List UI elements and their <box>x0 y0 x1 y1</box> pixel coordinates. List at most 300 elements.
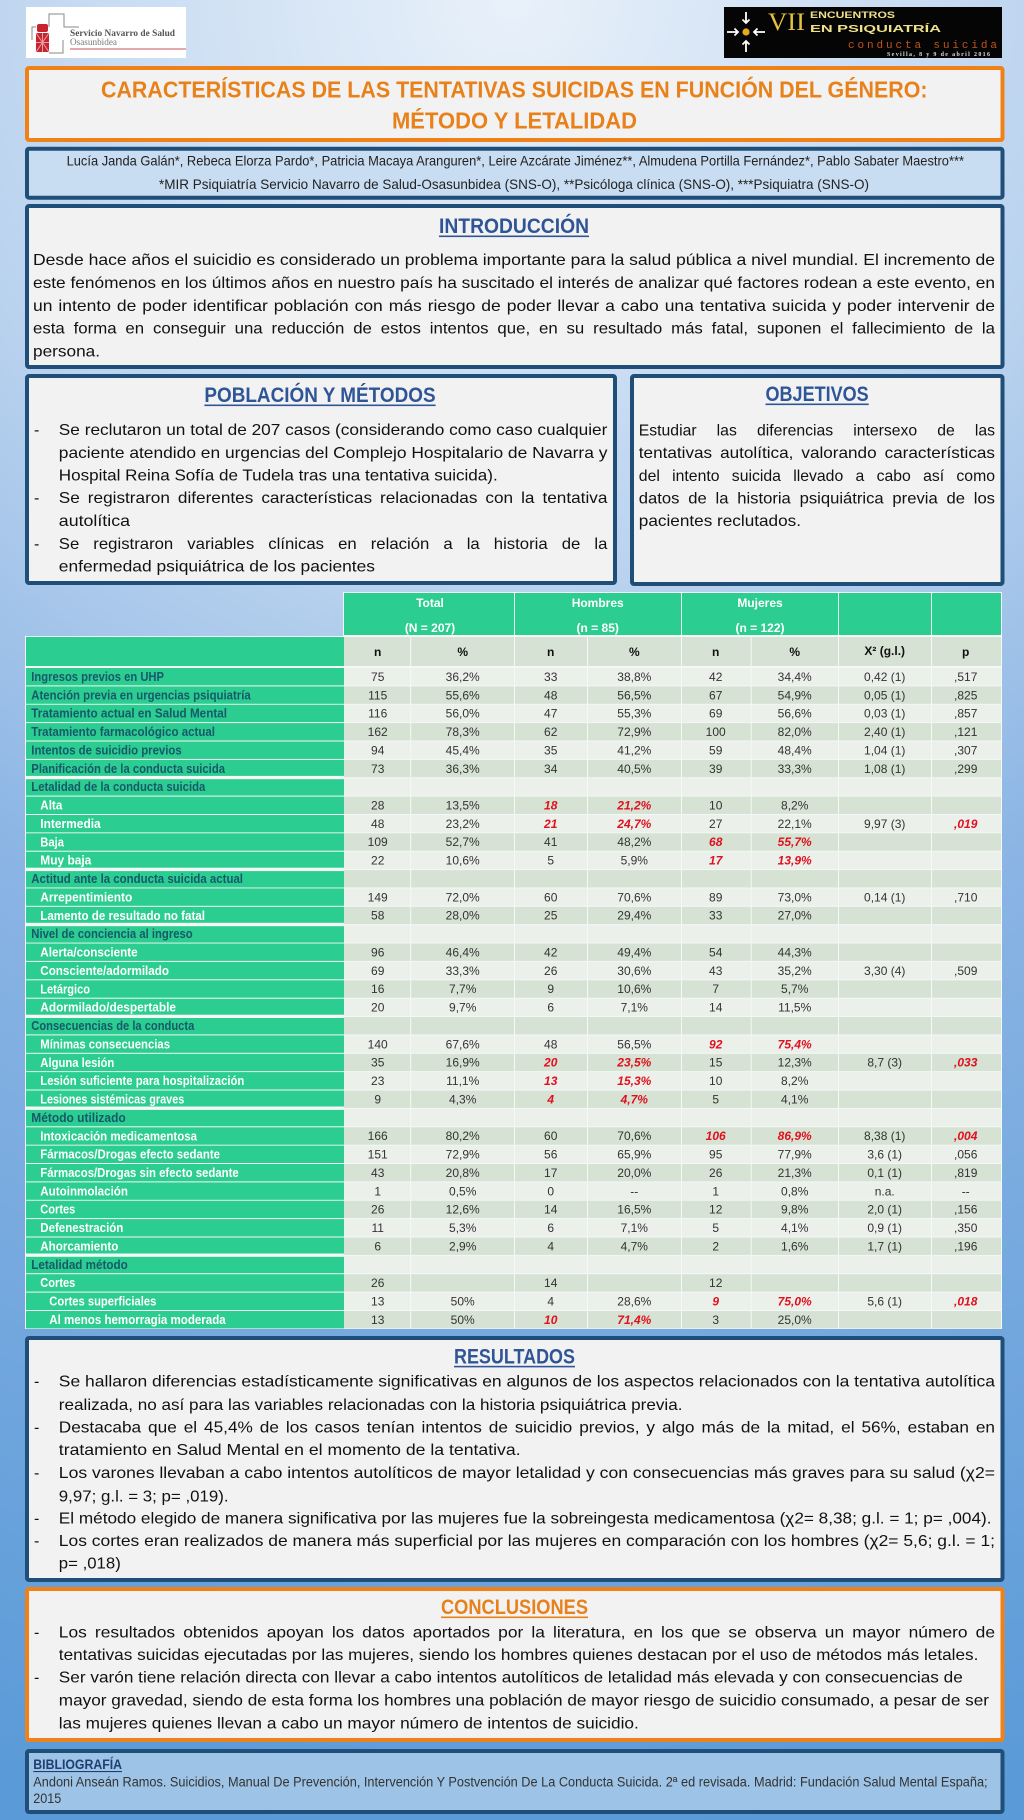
row: Intermedia: 9,97 (3) <box>864 817 905 831</box>
row: Alta: 28 <box>371 798 385 812</box>
row: Adormilado/despertable: 9,7% <box>449 1001 477 1015</box>
row: Intentos de suicidio previos: 59 <box>709 743 723 757</box>
text block: población y métodos: Se registraron diferentes características relacionadas con la tentativa <box>59 490 608 507</box>
row: Ahorcamiento: 4,7% <box>621 1239 648 1253</box>
text block: resultados: 9,97; g.l. = 3; p= ,019). <box>59 1489 229 1506</box>
row: Tratamiento actual en Salud Mental: 56,6% <box>778 707 812 721</box>
row: Defenestración <box>26 1219 1001 1236</box>
row: Ahorcamiento: 2 <box>712 1239 719 1253</box>
row: Arrepentimiento: 73,0% <box>778 890 812 904</box>
row: Intentos de suicidio previos: Intentos de suicidio previos <box>31 744 182 758</box>
row: Baja: 55,7% <box>778 835 812 849</box>
row: Baja: 52,7% <box>446 835 480 849</box>
row: Consciente/adormilado: 35,2% <box>778 964 812 978</box>
table header: groups: (n = 122) <box>735 621 785 635</box>
row: Lesiones sistémicas graves: 4,1% <box>781 1092 809 1106</box>
heading: objetivos: OBJETIVOS <box>766 383 869 406</box>
row: Ahorcamiento: ,196 <box>954 1239 978 1253</box>
row: Defenestración: ,350 <box>954 1221 978 1235</box>
row: Lamento de resultado no fatal: 25 <box>544 909 558 923</box>
row: Autoinmolación: 1 <box>712 1184 719 1198</box>
row: Alerta/consciente: 49,4% <box>617 945 652 959</box>
text block: población y métodos: enfermedad psiquiátrica de los pacientes <box>59 559 375 576</box>
row: Adormilado/despertable: Adormilado/despertable <box>40 1001 176 1015</box>
row: Fármacos/Drogas efecto sedante: 3,6 (1) <box>867 1148 902 1162</box>
row: Fármacos/Drogas sin efecto sedante: 20,8% <box>446 1166 480 1180</box>
logo: VII Encuentros en Psiquiatría: ENCUENTROS <box>810 10 895 20</box>
row: Cortes: Cortes <box>40 1203 75 1217</box>
text block: resultados: realizada, no así para las variables relacionadas con la historia psiquiátrica previa. <box>59 1397 683 1414</box>
row: Fármacos/Drogas efecto sedante: 151 <box>368 1148 388 1162</box>
row: Baja <box>26 833 1001 851</box>
text block: población y métodos: Se reclutaron un total de 207 casos (considerando como caso cualquier <box>59 422 608 439</box>
text block: objetivos: Estudiar las diferencias intersexo de las <box>639 423 995 440</box>
row: Letárgico: 10,6% <box>617 982 652 996</box>
row: Intoxicación medicamentosa: 8,38 (1) <box>864 1129 905 1143</box>
row: Fármacos/Drogas efecto sedante: 77,9% <box>778 1148 812 1162</box>
row: Alerta/consciente: Alerta/consciente <box>40 946 138 960</box>
text block: introducción <box>33 252 995 360</box>
row: Cortes superficiales: ,018 <box>953 1295 978 1309</box>
row: Consciente/adormilado: 3,30 (4) <box>864 964 905 978</box>
row: Atención previa en urgencias psiquiatría: 0,05 (1) <box>864 688 905 702</box>
row: Intentos de suicidio previos: ,307 <box>954 743 978 757</box>
heading: introducción: INTRODUCCIÓN <box>439 214 589 238</box>
row: Cortes <box>26 1201 1001 1218</box>
table header: columns: n <box>547 645 554 659</box>
row: Tratamiento actual en Salud Mental: 56,0% <box>446 707 480 721</box>
row: Consciente/adormilado <box>26 962 1001 979</box>
row: Tratamiento farmacológico actual: 62 <box>544 725 558 739</box>
row: Lesión suficiente para hospitalización: 11,1% <box>446 1074 480 1088</box>
row: Ahorcamiento: 1,7 (1) <box>867 1239 902 1253</box>
row: Adormilado/despertable: 6 <box>547 1001 554 1015</box>
logo: VII Encuentros en Psiquiatría: VII <box>768 9 805 36</box>
logo: Servicio Navarro de Salud: Osasunbidea <box>70 37 117 47</box>
row: Letalidad de la conducta suicida: Letalidad de la conducta suicida <box>31 780 206 794</box>
text block: bibliografía: 2015 <box>33 1791 61 1806</box>
row: Autoinmolación: 1 <box>374 1184 381 1198</box>
heading: población y métodos: POBLACIÓN Y MÉTODOS <box>204 383 436 407</box>
row: Fármacos/Drogas sin efecto sedante: 21,3% <box>778 1166 812 1180</box>
text block: población y métodos: paciente atendido en urgencias del Complejo Hospitalario de Navarra y <box>59 445 607 462</box>
row: Tratamiento actual en Salud Mental: Tratamiento actual en Salud Mental <box>31 707 227 721</box>
row: Al menos hemorragia moderada: 71,4% <box>617 1313 652 1327</box>
row: Letárgico <box>26 980 1001 998</box>
row: Muy baja: Muy baja <box>40 854 92 868</box>
row: Atención previa en urgencias psiquiatría: 56,5% <box>617 688 652 702</box>
row: Lamento de resultado no fatal: Lamento de resultado no fatal <box>40 909 205 923</box>
row: Lesiones sistémicas graves: 4,7% <box>620 1092 648 1106</box>
row: Alta: 21,2% <box>616 798 652 812</box>
row: Fármacos/Drogas sin efecto sedante <box>26 1164 1001 1181</box>
row: Alta <box>26 797 1001 814</box>
row: Alguna lesión: Alguna lesión <box>40 1056 114 1070</box>
text block: bibliografía <box>33 1775 988 1806</box>
row: Intoxicación medicamentosa: 166 <box>368 1129 388 1143</box>
title panel <box>27 68 1002 140</box>
row: Letárgico: 7 <box>712 982 719 996</box>
row: Tratamiento actual en Salud Mental: 0,03 (1) <box>864 707 905 721</box>
row: Adormilado/despertable: 14 <box>709 1001 723 1015</box>
row: Letalidad método: Letalidad método <box>31 1258 128 1272</box>
row: Planificación de la conducta suicida: 39 <box>709 762 723 776</box>
row: Arrepentimiento <box>26 888 1001 906</box>
row: Atención previa en urgencias psiquiatría: Atención previa en urgencias psiquiatría <box>31 688 252 702</box>
row: Cortes superficiales: 5,6 (1) <box>867 1295 902 1309</box>
text block: resultados: - <box>34 1465 39 1482</box>
row: Arrepentimiento: 60 <box>544 890 558 904</box>
row: Intermedia <box>26 815 1001 832</box>
row: Alta: 18 <box>544 798 558 812</box>
text block: resultados: Destacaba que el 45,4% de los casos tenían intentos de suicidio previos, y algo más de la mitad, el 56%, estaban en <box>59 1420 995 1437</box>
row: Defenestración: Defenestración <box>40 1221 123 1235</box>
row: Lesiones sistémicas graves: 4 <box>546 1092 554 1106</box>
row: Mínimas consecuencias: 75,4% <box>778 1037 812 1051</box>
row: Tratamiento farmacológico actual: 72,9% <box>617 725 652 739</box>
row: Cortes superficiales: 28,6% <box>617 1295 652 1309</box>
row: Cortes (letalidad método): Cortes <box>40 1276 75 1290</box>
table header: columns: p <box>962 645 969 659</box>
text block: objetivos: pacientes reclutados. <box>639 513 801 530</box>
table header: columns: n <box>374 645 381 659</box>
heading: bibliografía: BIBLIOGRAFÍA <box>33 1757 122 1772</box>
row: Planificación de la conducta suicida: 34 <box>544 762 558 776</box>
text block: resultados: Los cortes eran realizados de manera más superficial por las mujeres en comparación con los hombres (χ2= 5,6; g.l. = 1; <box>59 1533 995 1550</box>
row: Intermedia: ,019 <box>953 817 978 831</box>
row: Baja: 48,2% <box>617 835 652 849</box>
row: Intoxicación medicamentosa: 70,6% <box>617 1129 652 1143</box>
row: Mínimas consecuencias: 140 <box>368 1037 388 1051</box>
row: Cortes superficiales: 75,0% <box>778 1295 812 1309</box>
table header: columns: n <box>712 645 719 659</box>
row: Planificación de la conducta suicida <box>26 760 1001 777</box>
row: Lesiones sistémicas graves: 9 <box>374 1092 381 1106</box>
text block: resultados: Se hallaron diferencias estadísticamente significativas en algunos de los aspectos relacionados con la tentativa autolítica <box>59 1374 995 1391</box>
row: Muy baja <box>26 852 1001 869</box>
row: Lesión suficiente para hospitalización <box>26 1072 1001 1090</box>
row: Actitud ante la conducta suicida actual <box>26 870 1001 888</box>
row: Fármacos/Drogas efecto sedante <box>26 1146 1001 1163</box>
row: Lesión suficiente para hospitalización: 13 <box>544 1074 558 1088</box>
row: Lesión suficiente para hospitalización: Lesión suficiente para hospitalización <box>40 1074 244 1088</box>
table: características por género <box>25 592 1002 1329</box>
row: Consciente/adormilado: 43 <box>709 964 723 978</box>
row: Ahorcamiento: 4 <box>547 1239 554 1253</box>
row: Mínimas consecuencias: 67,6% <box>446 1037 480 1051</box>
row: Ingresos previos en UHP: Ingresos previos en UHP <box>31 670 164 684</box>
text block: resultados: - <box>34 1510 39 1527</box>
text block: introducción: este fenómenos en los últimos años en nuestro país ha suscitado el interés de analizar qué factores rodean a este evento, en <box>33 275 995 292</box>
row: Intentos de suicidio previos: 1,04 (1) <box>864 743 905 757</box>
row: Fármacos/Drogas sin efecto sedante: 0,1 (1) <box>867 1166 902 1180</box>
row: Intermedia: 21 <box>543 817 558 831</box>
row: Método utilizado <box>26 1109 1001 1126</box>
row: Letalidad método <box>26 1256 1001 1273</box>
table header: columns: % <box>629 645 640 659</box>
row: Cortes (letalidad método): 14 <box>544 1276 558 1290</box>
row: Intermedia: 23,2% <box>446 817 480 831</box>
row: Fármacos/Drogas efecto sedante: 72,9% <box>446 1148 480 1162</box>
row: Lamento de resultado no fatal: 27,0% <box>778 909 812 923</box>
row: Cortes: 16,5% <box>617 1203 652 1217</box>
logo: Servicio Navarro de Salud: Servicio Navarro de Salud <box>70 28 175 38</box>
row: Arrepentimiento: 89 <box>709 890 723 904</box>
row: Muy baja: 5,9% <box>621 854 648 868</box>
row: Consecuencias de la conducta: Consecuencias de la conducta <box>31 1019 195 1033</box>
row: Cortes superficiales: 13 <box>371 1295 385 1309</box>
row: Consciente/adormilado: 30,6% <box>617 964 652 978</box>
row: Lesiones sistémicas graves: 4,3% <box>449 1092 477 1106</box>
text block: resultados: El método elegido de manera significativa por las mujeres fue la sobreingesta medicamentosa (χ2= 8,38; g.l. = 1; p= ,004). <box>59 1510 992 1527</box>
row: Adormilado/despertable <box>26 999 1001 1016</box>
panel: objetivos <box>632 376 1002 584</box>
row: Fármacos/Drogas efecto sedante: ,056 <box>954 1148 978 1162</box>
logo: VII Encuentros en Psiquiatría <box>724 7 1002 58</box>
row: Atención previa en urgencias psiquiatría: 67 <box>709 688 723 702</box>
row: Mínimas consecuencias: Mínimas consecuencias <box>40 1037 170 1051</box>
row: Consciente/adormilado: 26 <box>544 964 558 978</box>
row: Al menos hemorragia moderada: 50% <box>451 1313 475 1327</box>
row: Intentos de suicidio previos: 41,2% <box>617 743 652 757</box>
row: Autoinmolación: Autoinmolación <box>40 1184 128 1198</box>
row: Tratamiento farmacológico actual: 78,3% <box>446 725 480 739</box>
heading: conclusiones: CONCLUSIONES <box>441 1596 588 1619</box>
text block: introducción: Desde hace años el suicidio es considerado un problema importante para la salud pública a nivel mundial. El incremento de <box>33 252 995 269</box>
row: Fármacos/Drogas sin efecto sedante: Fármacos/Drogas sin efecto sedante <box>40 1166 239 1180</box>
row: Fármacos/Drogas sin efecto sedante: 26 <box>709 1166 723 1180</box>
row: Fármacos/Drogas sin efecto sedante: ,819 <box>954 1166 978 1180</box>
row: Cortes superficiales <box>26 1293 1001 1310</box>
row: Intoxicación medicamentosa: 80,2% <box>446 1129 480 1143</box>
table header: groups: Mujeres <box>737 596 783 610</box>
row: Lesión suficiente para hospitalización: 8,2% <box>781 1074 809 1088</box>
row: Mínimas consecuencias: 56,5% <box>617 1037 652 1051</box>
panel: población y métodos <box>27 376 615 583</box>
row: Alta: 8,2% <box>781 798 809 812</box>
text block: conclusiones: Ser varón tiene relación directa con llevar a cabo intentos autolíticos de letalidad más elevada y con consecuencias de <box>59 1670 963 1687</box>
row: Mínimas consecuencias: 92 <box>709 1037 723 1051</box>
row: Alerta/consciente: 44,3% <box>778 945 812 959</box>
text block: conclusiones: Los resultados obtenidos apoyan los datos aportados por la literatura, en los que se observa un mayor número de <box>59 1625 995 1642</box>
logo: VII Encuentros en Psiquiatría: conducta suicida <box>848 40 997 52</box>
row: Autoinmolación: 0 <box>547 1184 554 1198</box>
row: Ingresos previos en UHP: 75 <box>371 670 385 684</box>
row: Al menos hemorragia moderada: 3 <box>712 1313 719 1327</box>
text block: población y métodos <box>34 422 608 576</box>
text block: población y métodos: - <box>34 490 39 507</box>
row: Alerta/consciente <box>26 944 1001 961</box>
row: Planificación de la conducta suicida: 33,3% <box>778 762 812 776</box>
row: Intentos de suicidio previos: 94 <box>371 743 385 757</box>
row: Cortes: ,156 <box>954 1203 978 1217</box>
authors panel <box>27 149 1002 198</box>
row: Alta: Alta <box>40 799 63 813</box>
row: Fármacos/Drogas efecto sedante: 65,9% <box>617 1148 652 1162</box>
text block: conclusiones: - <box>34 1625 39 1642</box>
row: Lesión suficiente para hospitalización: 15,3% <box>617 1074 652 1088</box>
row: Tratamiento actual en Salud Mental: 69 <box>709 707 723 721</box>
row: Fármacos/Drogas efecto sedante: Fármacos/Drogas efecto sedante <box>40 1148 220 1162</box>
row: Lamento de resultado no fatal: 33 <box>709 909 723 923</box>
row: Fármacos/Drogas sin efecto sedante: 17 <box>544 1166 558 1180</box>
text block: conclusiones: tentativas suicidas ejecutadas por las mujeres, siendo los hombres quienes destacan por el uso de métodos más letales. <box>59 1647 978 1664</box>
row: Intoxicación medicamentosa: 86,9% <box>778 1129 812 1143</box>
row: Ingresos previos en UHP: 36,2% <box>446 670 480 684</box>
row: Defenestración: 5 <box>712 1221 719 1235</box>
row: Cortes superficiales: 4 <box>547 1295 554 1309</box>
row: Método utilizado: Método utilizado <box>31 1111 126 1125</box>
text block: resultados: p= ,018) <box>59 1555 121 1572</box>
panel: conclusiones <box>27 1589 1002 1740</box>
row: Al menos hemorragia moderada: 13 <box>371 1313 385 1327</box>
logo: VII Encuentros en Psiquiatría: Sevilla, 8 y 9 de abril 2016 <box>887 52 990 58</box>
row: Alguna lesión: 16,9% <box>446 1056 480 1070</box>
row: Tratamiento farmacológico actual: 162 <box>368 725 388 739</box>
row: Arrepentimiento: 0,14 (1) <box>864 890 905 904</box>
logo: Servicio Navarro de Salud <box>26 7 186 58</box>
row: Letárgico: 5,7% <box>781 982 809 996</box>
row: Al menos hemorragia moderada: 10 <box>544 1313 558 1327</box>
text block: resultados: - <box>34 1533 39 1550</box>
row: Lamento de resultado no fatal <box>26 907 1001 924</box>
row: Al menos hemorragia moderada: 25,0% <box>778 1313 812 1327</box>
row: Tratamiento farmacológico actual: 100 <box>706 725 726 739</box>
row: Intoxicación medicamentosa: 106 <box>706 1129 726 1143</box>
row: Consciente/adormilado: Consciente/adormilado <box>40 964 169 978</box>
row: Intermedia: Intermedia <box>40 817 102 831</box>
text block: población y métodos: Se registraron variables clínicas en relación a la historia de la <box>59 536 608 553</box>
row: Tratamiento actual en Salud Mental: 55,3% <box>617 707 652 721</box>
table header: columns <box>26 637 1001 666</box>
row: Autoinmolación: 0,8% <box>781 1184 809 1198</box>
row: Adormilado/despertable: 7,1% <box>621 1001 648 1015</box>
row: Alguna lesión: 20 <box>543 1056 558 1070</box>
text block: objetivos: tentativas autolítica, valorando características <box>639 445 995 462</box>
row: Intentos de suicidio previos: 45,4% <box>446 743 480 757</box>
text block: objetivos: datos de la historia psiquiátrica previa de los <box>639 490 995 508</box>
row: Lesiones sistémicas graves: Lesiones sistémicas graves <box>40 1092 184 1106</box>
heading: resultados: RESULTADOS <box>454 1345 575 1368</box>
row: Consciente/adormilado: ,509 <box>954 964 978 978</box>
row: Fármacos/Drogas sin efecto sedante: 43 <box>371 1166 385 1180</box>
row: Al menos hemorragia moderada: Al menos hemorragia moderada <box>49 1313 227 1327</box>
panel: bibliografía <box>27 1751 1002 1812</box>
row: Autoinmolación: 0,5% <box>449 1184 477 1198</box>
row: Tratamiento actual en Salud Mental: ,857 <box>954 707 978 721</box>
row: Defenestración: 4,1% <box>781 1221 809 1235</box>
row: Alerta/consciente: 96 <box>371 945 385 959</box>
row: Arrepentimiento: 70,6% <box>617 890 652 904</box>
row: Lesión suficiente para hospitalización: 23 <box>371 1074 385 1088</box>
row: Tratamiento farmacológico actual: Tratamiento farmacológico actual <box>31 725 215 739</box>
row: Arrepentimiento: ,710 <box>954 890 978 904</box>
row: Cortes: 14 <box>544 1203 558 1217</box>
row: Planificación de la conducta suicida: 36,3% <box>446 762 480 776</box>
authors panel: *MIR Psiquiatría Servicio Navarro de Salud-Osasunbidea (SNS-O), **Psicóloga clínica (SNS-O), ***Psiquiatra (SNS-O) <box>159 176 869 192</box>
row: Actitud ante la conducta suicida actual: Actitud ante la conducta suicida actual <box>31 872 243 886</box>
text block: resultados: - <box>34 1374 39 1391</box>
row: Defenestración: 0,9 (1) <box>867 1221 902 1235</box>
row: Alguna lesión: 15 <box>709 1056 723 1070</box>
row: Cortes: 12,6% <box>446 1203 480 1217</box>
row: Ingresos previos en UHP <box>26 668 1001 685</box>
row: Arrepentimiento: Arrepentimiento <box>40 890 133 904</box>
row: Consciente/adormilado: 33,3% <box>446 964 480 978</box>
row: Ingresos previos en UHP: ,517 <box>954 670 978 684</box>
text block: conclusiones: las mujeres quienes llevan a cabo un mayor número de intentos de suicidio. <box>59 1715 639 1732</box>
row: Alguna lesión <box>26 1054 1001 1071</box>
row: Defenestración: 7,1% <box>621 1221 648 1235</box>
row: Alguna lesión: ,033 <box>953 1056 978 1070</box>
row: Cortes (letalidad método) <box>26 1274 1001 1292</box>
table header: columns: X² (g.l.) <box>864 644 905 658</box>
row: Autoinmolación <box>26 1182 1001 1200</box>
row: Consciente/adormilado: 69 <box>371 964 385 978</box>
text block: población y métodos: Hospital Reina Sofía de Tudela tras una tentativa suicida). <box>59 468 498 484</box>
row: Planificación de la conducta suicida: 40,5% <box>617 762 652 776</box>
row: Intentos de suicidio previos: 48,4% <box>778 743 812 757</box>
row: Baja: 41 <box>544 835 558 849</box>
row: Intentos de suicidio previos: 35 <box>544 743 558 757</box>
row: Alguna lesión: 12,3% <box>778 1056 812 1070</box>
row: Intentos de suicidio previos <box>26 742 1001 759</box>
row: Defenestración: 6 <box>547 1221 554 1235</box>
row: Cortes superficiales: Cortes superficiales <box>49 1295 156 1309</box>
table header: groups: Total <box>416 596 444 610</box>
table header: groups: (N = 207) <box>405 621 455 635</box>
row: Ingresos previos en UHP: 38,8% <box>617 670 652 684</box>
text block: introducción: un intento de poder identificar población con más riesgo de poder llevar a cabo una tentativa suicida y poder intervenir de <box>33 298 995 315</box>
row: Alerta/consciente: 54 <box>709 945 723 959</box>
row: Lesiones sistémicas graves: 5 <box>712 1092 719 1106</box>
row: Lamento de resultado no fatal: 58 <box>371 909 385 923</box>
text block: conclusiones: mayor gravedad, siendo de esta forma los hombres una población de mayor riesgo de suicidio consumado, a pesar de ser <box>59 1693 990 1710</box>
row: Tratamiento actual en Salud Mental: 47 <box>544 707 558 721</box>
row: Muy baja: 22 <box>371 854 385 868</box>
row: Fármacos/Drogas efecto sedante: 95 <box>709 1148 723 1162</box>
row: Alerta/consciente: 42 <box>544 945 558 959</box>
row: Lesiones sistémicas graves <box>26 1090 1001 1108</box>
row: Intermedia: 24,7% <box>616 817 652 831</box>
row: Cortes: 2,0 (1) <box>867 1203 902 1217</box>
text block: introducción: esta forma en conseguir una reducción de estos intentos que, en su resultado más fatal, suponen el fallecimiento de la <box>33 320 995 338</box>
row: Muy baja: 17 <box>709 854 724 868</box>
row: Ahorcamiento: 2,9% <box>449 1239 477 1253</box>
row: Letalidad de la conducta suicida <box>26 778 1001 796</box>
row: Al menos hemorragia moderada <box>26 1311 1001 1328</box>
row: Intoxicación medicamentosa: Intoxicación medicamentosa <box>40 1129 198 1143</box>
title panel: CARACTERÍSTICAS DE LAS TENTATIVAS SUICIDAS EN FUNCIÓN DEL GÉNERO: <box>101 76 928 102</box>
row: Intermedia: 48 <box>371 817 385 831</box>
row: Intoxicación medicamentosa: 60 <box>544 1129 558 1143</box>
row: Atención previa en urgencias psiquiatría: 115 <box>368 688 388 702</box>
row: Atención previa en urgencias psiquiatría: 55,6% <box>446 688 480 702</box>
row: Atención previa en urgencias psiquiatría: ,825 <box>954 688 978 702</box>
text block: conclusiones: - <box>34 1670 39 1687</box>
row: Autoinmolación: -- <box>630 1184 638 1198</box>
row: Alta: 10 <box>709 798 723 812</box>
row: Tratamiento actual en Salud Mental <box>26 705 1001 722</box>
row: Cortes (letalidad método): 26 <box>371 1276 385 1290</box>
row: Ahorcamiento: 6 <box>374 1239 381 1253</box>
row: Cortes (letalidad método): 12 <box>709 1276 723 1290</box>
row: Muy baja: 13,9% <box>778 854 812 868</box>
text block: resultados <box>34 1374 995 1572</box>
text block: bibliografía: Andoni Anseán Ramos. Suicidios, Manual De Prevención, Intervención Y Postvención De La Conducta Suicida. 2ª ed revisada. Madrid: Fundación Salud Mental España; <box>33 1775 988 1790</box>
text block: resultados: tratamiento en Salud Mental en el momento de la tentativa. <box>59 1442 521 1459</box>
row: Baja: 109 <box>368 835 388 849</box>
